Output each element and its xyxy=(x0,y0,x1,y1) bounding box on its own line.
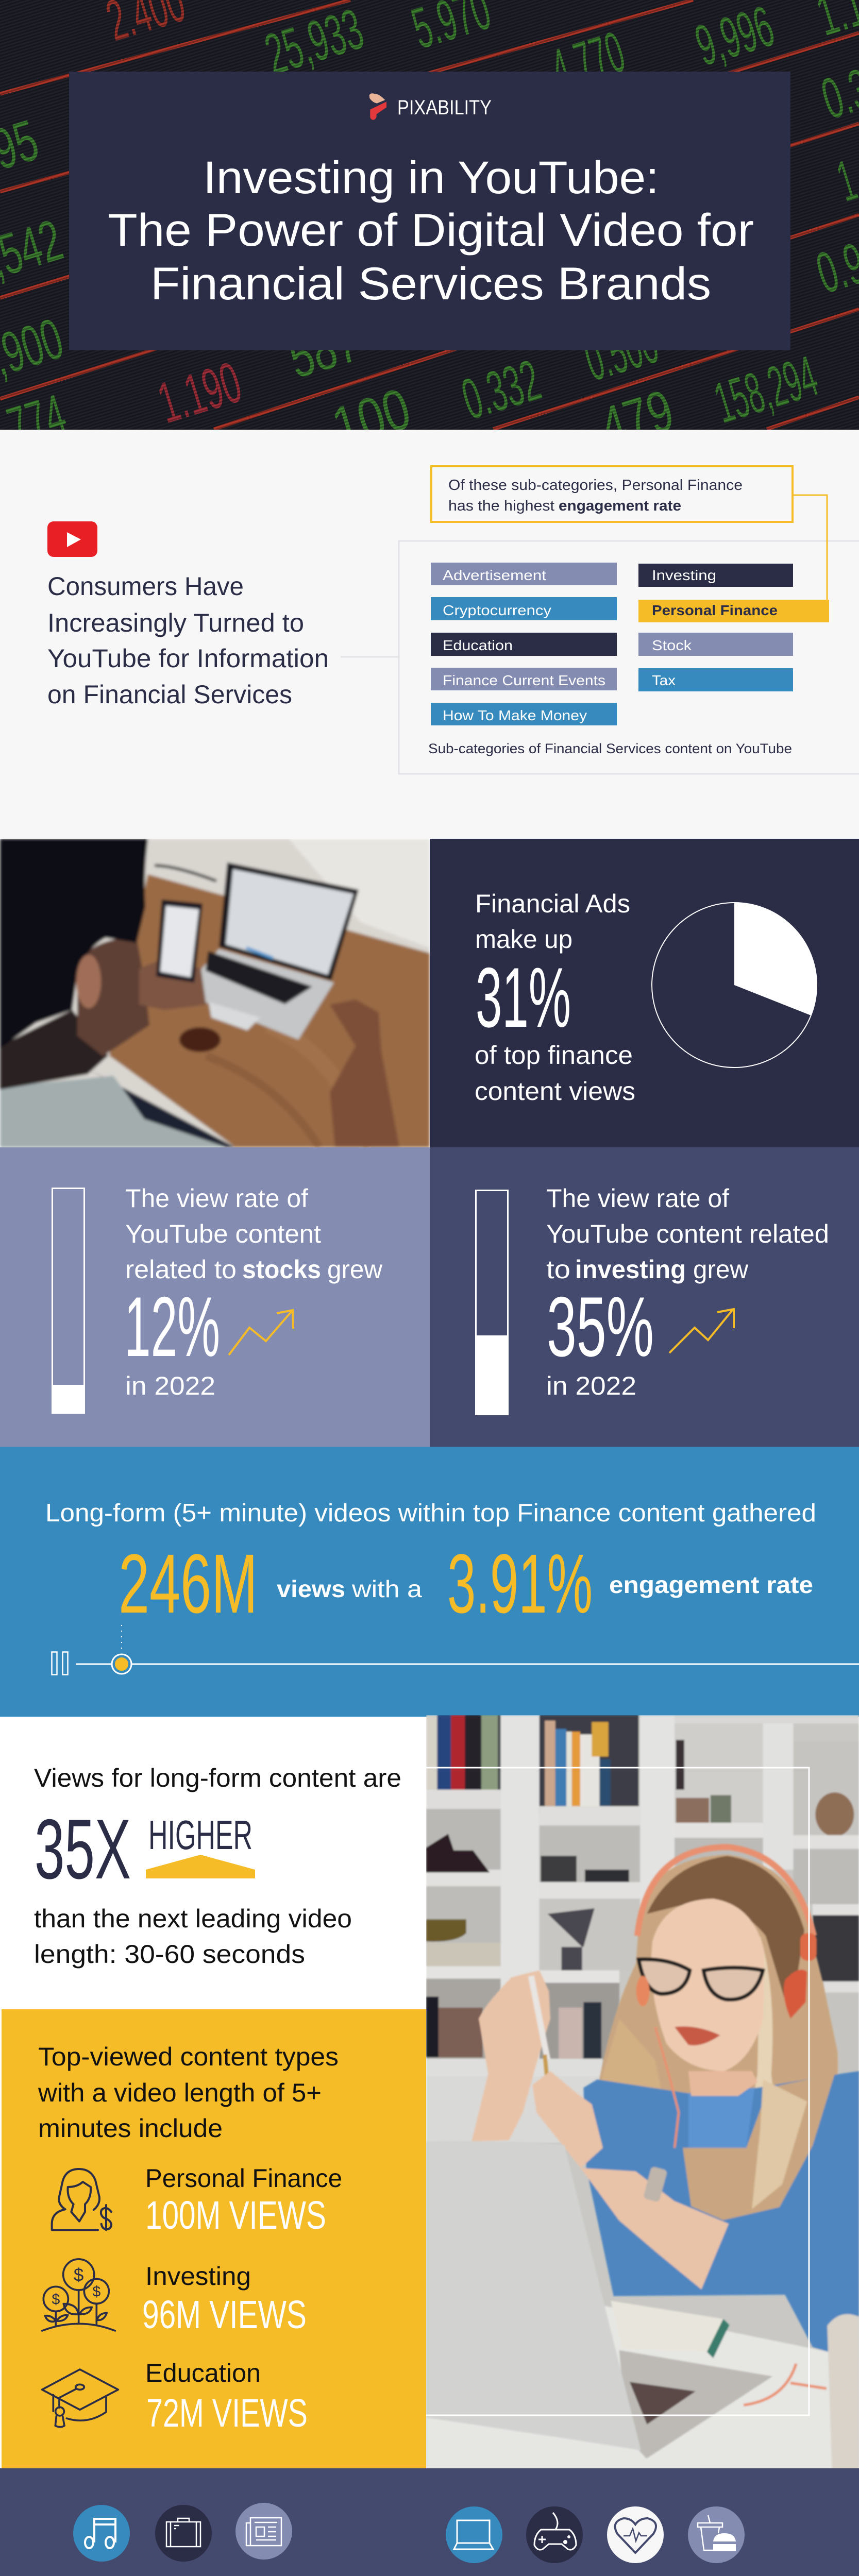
stat: education: 72M VIEWS xyxy=(146,2391,308,2435)
section: consumers and sub-categories xyxy=(0,430,859,839)
icon: money plants: $ xyxy=(92,2283,100,2300)
icon: briefcase xyxy=(155,2505,212,2562)
icon: newspaper xyxy=(235,2503,292,2560)
panel: investing view rate xyxy=(430,1147,859,1447)
white frame xyxy=(426,1768,809,2415)
stat: education: Education xyxy=(145,2359,261,2387)
heading: consumers: Consumers Have xyxy=(47,572,244,601)
tag: Investing: Investing xyxy=(652,567,716,583)
title: Financial Services Brands xyxy=(150,258,711,309)
logo: Pixability: PIXABILITY xyxy=(397,96,492,119)
logo: Pixability xyxy=(369,93,492,120)
tag: Cryptocurrency: Cryptocurrency xyxy=(443,602,551,618)
tag: Advertisement xyxy=(431,563,617,585)
arrow: up trend xyxy=(229,1310,293,1355)
text: stocks: grew xyxy=(327,1255,383,1284)
progress bar: 35% xyxy=(475,1190,508,1415)
text: than next leading xyxy=(34,1904,352,1969)
title panel xyxy=(69,72,790,350)
icon: heart pulse xyxy=(607,2506,664,2563)
icon: graduation cap xyxy=(42,2369,118,2427)
heading: consumers xyxy=(47,572,329,709)
stat: personal finance: 100M VIEWS xyxy=(145,2193,326,2238)
text: stocks: 12% xyxy=(124,1279,220,1374)
stat: 3.91% engagement xyxy=(447,1536,813,1631)
stat: 3.91% engagement: engagement rate xyxy=(609,1571,813,1598)
callout: highest engagement: Of these sub-categories, Personal Finance xyxy=(448,477,743,494)
stat: investing: Investing xyxy=(145,2262,251,2291)
tag: Cryptocurrency xyxy=(431,597,617,620)
title: The Power of Digital Video for xyxy=(108,204,754,256)
text: than next leading: than the next leading video xyxy=(34,1904,352,1933)
text: investing: to xyxy=(546,1255,570,1284)
panel: 35X higher xyxy=(0,1717,426,2009)
text: financial ads: 31% xyxy=(476,950,571,1045)
glasses xyxy=(638,1959,763,1999)
stat: personal finance: Personal Finance xyxy=(145,2164,342,2193)
text: financial ads: of top finance xyxy=(475,1041,633,1070)
tag: Education: Education xyxy=(443,637,513,653)
text: stocks xyxy=(124,1184,383,1400)
text: stocks: in 2022 xyxy=(125,1371,215,1400)
callout: highest engagement: engagement rate xyxy=(559,498,681,514)
hair xyxy=(599,1854,839,2094)
stock ticker background: 0.500 xyxy=(577,310,665,393)
heading: consumers: on Financial Services xyxy=(47,680,292,709)
text: investing: in 2022 xyxy=(546,1371,636,1400)
callout: highest engagement xyxy=(431,466,827,600)
text: financial ads: content views xyxy=(475,1077,635,1106)
icon: food and beverage xyxy=(688,2506,745,2563)
progress bar: 12% xyxy=(52,1188,85,1414)
sub-categories box xyxy=(341,541,859,774)
text: financial ads: make up xyxy=(475,925,572,954)
text: investing: The view rate of xyxy=(546,1184,729,1213)
tag: How To Make Money: How To Make Money xyxy=(443,707,587,723)
stat: 246M views: 246M xyxy=(119,1536,258,1631)
text: top-viewed: with a video length of 5+ xyxy=(38,2078,322,2107)
photo: woman with headphones and laptop xyxy=(426,1715,859,2469)
lower forearm and hand xyxy=(471,1971,550,2142)
text: investing: 35% xyxy=(547,1279,654,1374)
panel: financial ads stat xyxy=(430,839,859,1147)
photo: man with laptop and phone xyxy=(0,839,430,1147)
icon: gamepad xyxy=(526,2506,583,2563)
label: higher: HIGHER xyxy=(148,1812,252,1858)
face xyxy=(651,1899,764,2071)
stock ticker background: 4.770 xyxy=(544,19,632,102)
caption: Sub-categories of Financial Services content on YouTube xyxy=(428,741,792,756)
stock ticker background: 1.190 xyxy=(150,350,248,435)
tag: Education xyxy=(431,633,617,656)
laptop xyxy=(619,2350,772,2459)
panel: audience behaviour xyxy=(0,2468,859,2576)
text: investing: investing xyxy=(575,1255,686,1284)
table and papers xyxy=(426,2303,859,2469)
icon: person with dollar xyxy=(52,2169,111,2230)
stat: 246M views xyxy=(119,1536,422,1631)
tag: Finance Current Events xyxy=(431,668,617,690)
callout: highest engagement: has the highest xyxy=(448,498,554,514)
tag: Personal Finance xyxy=(638,600,829,622)
tag: Investing xyxy=(638,564,793,587)
headphones xyxy=(637,1847,814,1936)
text: stocks: YouTube content xyxy=(125,1219,321,1248)
tag: Personal Finance: Personal Finance xyxy=(652,602,778,618)
label: higher xyxy=(146,1812,255,1878)
panel: stocks view rate xyxy=(0,1147,430,1447)
heading: consumers: Increasingly Turned to xyxy=(47,608,304,637)
sweater xyxy=(583,2071,859,2361)
tag: Tax: Tax xyxy=(652,672,676,688)
icon: money plants xyxy=(42,2259,115,2331)
stat: personal finance xyxy=(145,2164,342,2238)
tag: Stock xyxy=(638,633,793,656)
icon: music xyxy=(73,2505,130,2562)
stock ticker background: 479 xyxy=(593,377,681,460)
panel: long-form views xyxy=(0,1447,859,1717)
text: top-viewed: Top-viewed content types xyxy=(38,2042,339,2071)
icon: money plants: $ xyxy=(74,2265,83,2285)
text: views for long-form: Views for long-form content are xyxy=(34,1764,401,1792)
stat: 35X: 35X xyxy=(35,1802,131,1896)
stat: 3.91% engagement: 3.91% xyxy=(447,1536,593,1631)
text: investing xyxy=(546,1184,829,1400)
arrow: up trend xyxy=(669,1309,734,1353)
icon: YouTube play xyxy=(47,521,97,557)
stat: investing xyxy=(142,2262,307,2337)
stock ticker background: 100 xyxy=(325,376,417,460)
tag: Advertisement: Advertisement xyxy=(443,567,546,583)
stock ticker background: 774 xyxy=(0,382,73,460)
stock ticker background xyxy=(0,0,859,460)
stat: investing: 96M VIEWS xyxy=(142,2293,307,2337)
text: top-viewed xyxy=(38,2042,339,2143)
text: than next leading: length: 30-60 seconds xyxy=(34,1940,305,1969)
tag: Stock: Stock xyxy=(652,637,692,653)
stat: education xyxy=(145,2359,308,2435)
stat: 246M views: views xyxy=(277,1575,345,1602)
title xyxy=(108,151,754,309)
tag: Finance Current Events: Finance Current Events xyxy=(443,672,605,688)
text: investing: grew xyxy=(693,1255,749,1284)
text: stocks: stocks xyxy=(242,1255,321,1284)
tag: Tax xyxy=(638,668,793,691)
icon: money plants: $ xyxy=(52,2291,60,2308)
heading: long-form: Long-form (5+ minute) videos within top Finance content gathered xyxy=(45,1499,816,1527)
text: investing: YouTube content related xyxy=(546,1219,829,1248)
icon: laptop xyxy=(446,2506,502,2563)
video player scrubber xyxy=(52,1625,859,1674)
panel: top-viewed content types xyxy=(0,2009,426,2469)
title: Investing in YouTube: xyxy=(203,151,659,203)
pie chart: 31% xyxy=(652,903,817,1067)
heading: consumers: YouTube for Information xyxy=(47,644,329,673)
text: stocks: The view rate of xyxy=(125,1184,308,1213)
hero section xyxy=(0,0,859,460)
text: stocks: related to xyxy=(125,1255,237,1284)
tag: How To Make Money xyxy=(431,703,617,725)
text: financial ads: Financial Ads xyxy=(475,889,630,918)
stat: 246M views: with a xyxy=(351,1575,422,1602)
stock ticker background: 0.332 xyxy=(454,348,547,432)
stock ticker background: 587 xyxy=(281,309,366,391)
text: top-viewed: minutes include xyxy=(38,2114,223,2143)
text: financial ads xyxy=(475,889,635,1106)
